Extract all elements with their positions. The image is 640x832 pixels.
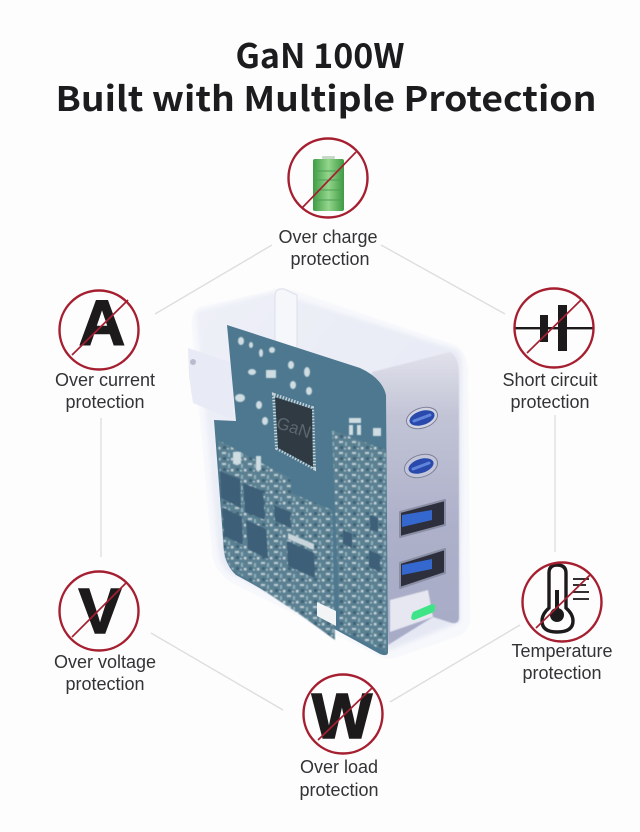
over current label: Over current	[55, 370, 155, 390]
short circuit label: protection	[510, 392, 590, 412]
prong top	[275, 289, 297, 352]
pcb dots	[233, 337, 381, 470]
over current icon: A	[79, 287, 125, 359]
title: GaN 100W	[236, 29, 404, 78]
short circuit icon	[514, 288, 594, 368]
over voltage label: Over voltage	[54, 652, 156, 672]
prong left	[188, 348, 233, 420]
over load label: Over load	[300, 757, 378, 777]
over voltage icon: V	[79, 575, 122, 647]
usb-c port 2	[401, 450, 441, 482]
title	[56, 29, 596, 121]
short circuit label: Short circuit	[502, 370, 598, 390]
temperature icon	[522, 562, 602, 642]
over current icon	[60, 287, 138, 370]
white foot and led	[390, 590, 433, 632]
over charge label	[278, 227, 378, 269]
title: Built with Multiple Protection	[56, 72, 596, 121]
over current label	[55, 370, 155, 412]
over voltage label	[54, 652, 156, 694]
over load icon	[304, 674, 382, 754]
over load label	[299, 757, 379, 800]
side face with ports	[372, 352, 459, 645]
pcb	[214, 325, 388, 655]
over charge label: Over charge	[278, 227, 378, 247]
GaN chip	[274, 395, 314, 468]
usb-c port 1	[404, 404, 440, 432]
short circuit label	[502, 370, 598, 412]
temperature label: protection	[522, 663, 602, 683]
connector lines	[101, 245, 555, 710]
usb-a port 2	[400, 549, 445, 588]
over charge label: protection	[290, 249, 370, 269]
charger device	[188, 288, 470, 659]
temperature label: Temperature	[511, 641, 613, 661]
usb-a port 1	[400, 500, 445, 537]
over current label: protection	[65, 392, 145, 412]
over load icon: W	[312, 680, 373, 752]
mosfet chips	[220, 471, 380, 578]
white label	[317, 602, 336, 626]
over voltage label: protection	[65, 674, 145, 694]
over charge icon	[288, 138, 368, 218]
over load label: protection	[299, 780, 379, 800]
GaN chip: GaN	[274, 413, 313, 442]
temperature label	[511, 641, 613, 683]
over voltage icon	[60, 572, 138, 650]
translucent shell	[192, 288, 470, 659]
